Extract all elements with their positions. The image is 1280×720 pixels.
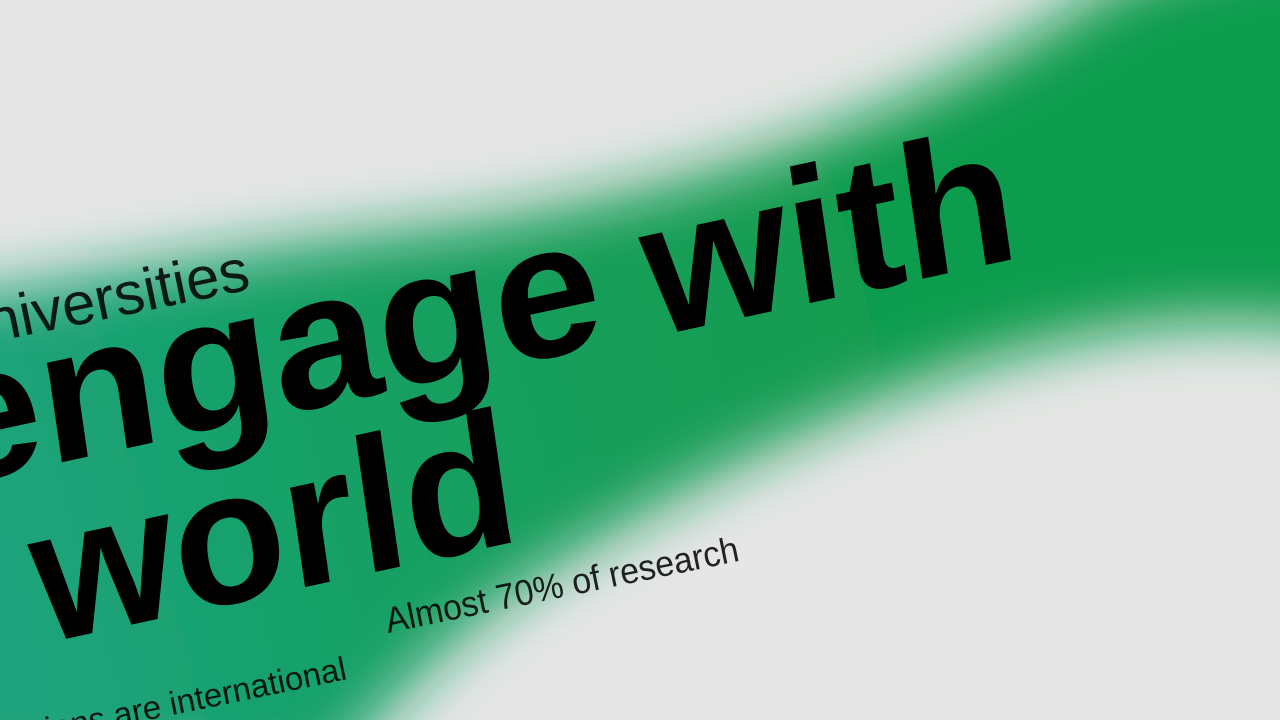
heading: with: with (628, 88, 1028, 378)
caption: research: Almost 70% of research (381, 528, 742, 641)
heading: world: world (17, 371, 529, 685)
